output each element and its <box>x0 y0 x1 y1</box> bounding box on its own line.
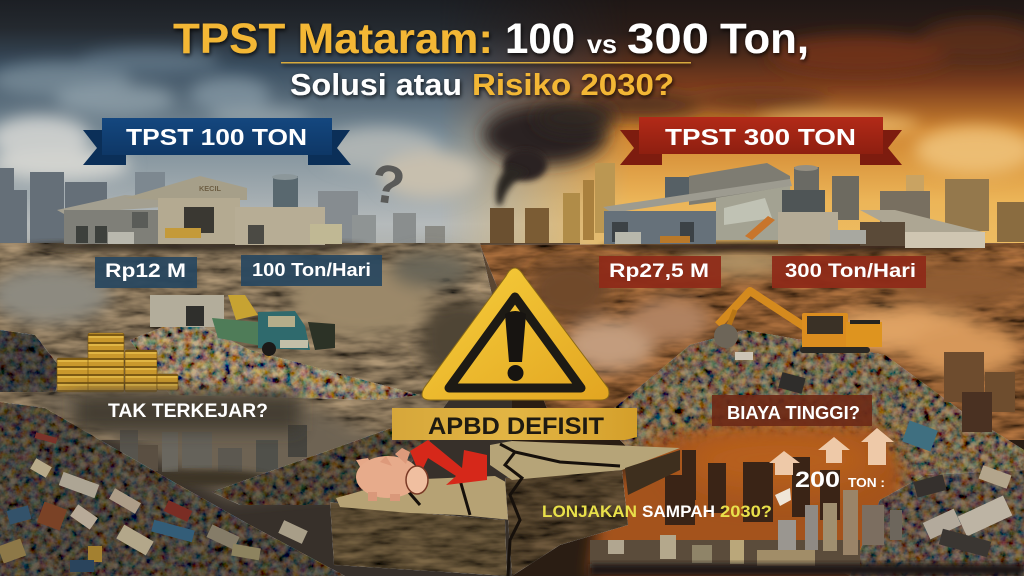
label: BIAYA TINGGI?: BIAYA TINGGI? <box>727 403 860 423</box>
label: BIAYA TINGGI? <box>712 395 872 426</box>
title: Ton, <box>720 15 809 63</box>
trash pieces <box>0 432 308 572</box>
title: 100 <box>505 15 575 63</box>
label: 200 TON: TON : <box>848 475 885 490</box>
gray modern city <box>590 490 902 568</box>
ground base <box>0 243 1024 576</box>
left block <box>330 476 520 576</box>
banner: TPST 100 TON: TPST 100 TON <box>126 124 307 150</box>
title: TPST Mataram: <box>173 15 493 63</box>
ground: left terrain <box>0 243 500 440</box>
skyline: left city <box>0 168 445 248</box>
cracked ground platform <box>330 441 680 576</box>
soil tones <box>0 248 1024 395</box>
label: LONJAKAN SAMPAH 2030?: SAMPAH <box>642 502 715 521</box>
label: LONJAKAN SAMPAH 2030? <box>542 502 772 521</box>
ground: right terrain <box>480 243 1024 440</box>
small facility with stairs <box>150 295 258 327</box>
dark city silhouette <box>665 450 840 525</box>
banner: TPST 300 TON <box>620 117 902 165</box>
icon: question mark: ? <box>367 153 409 217</box>
tower <box>272 174 298 212</box>
right building behind heap <box>944 352 1015 432</box>
warning sign <box>422 268 609 400</box>
title: Solusi atau <box>290 67 462 102</box>
title: vs <box>587 29 617 59</box>
factory: small TPST 100 <box>25 174 365 251</box>
skyline: right city <box>490 163 1024 250</box>
label: LONJAKAN SAMPAH 2030?: 2030? <box>720 502 772 521</box>
label: 200 TON: 200 <box>795 467 840 492</box>
label: 200 TON <box>795 467 885 492</box>
trash heap: large right <box>600 330 1024 576</box>
background: split sky <box>0 0 1024 244</box>
label: TAK TERKEJAR? <box>75 395 300 431</box>
icon: rising arrows <box>769 428 894 475</box>
banner: TPST 300 TON: TPST 300 TON <box>665 124 856 150</box>
crack lines <box>400 444 620 576</box>
stat: 300 Ton/Hari <box>772 256 926 288</box>
icon: small white debris <box>775 488 791 506</box>
stat: Rp27,5 M: Rp27,5 M <box>609 261 709 282</box>
bottom dark ground <box>590 564 1024 576</box>
band: APBD DEFISIT <box>392 408 637 440</box>
stat: Rp12 M <box>95 257 197 288</box>
coin stacks <box>57 333 178 392</box>
truck <box>212 311 335 356</box>
title: Risiko 2030? <box>472 67 674 102</box>
exclamation mark <box>505 311 526 381</box>
stat: Rp27,5 M <box>599 256 721 288</box>
icon: red decline arrow <box>410 440 487 485</box>
city glow under heap <box>590 425 905 576</box>
label: LONJAKAN SAMPAH 2030?: LONJAKAN <box>542 502 637 521</box>
stat: 100 Ton/Hari: 100 Ton/Hari <box>252 260 371 280</box>
trash pile: far left dark <box>0 330 62 392</box>
icon: piggy bank <box>356 448 428 501</box>
excavator <box>714 291 882 353</box>
trash pile: mid left <box>130 318 420 400</box>
stat: Rp12 M: Rp12 M <box>105 261 186 282</box>
right block <box>490 441 680 576</box>
stat: 100 Ton/Hari <box>241 255 382 286</box>
trash pieces right <box>735 352 1012 557</box>
label: TAK TERKEJAR?: TAK TERKEJAR? <box>108 401 268 422</box>
trash pile: center <box>212 425 430 505</box>
stat: 300 Ton/Hari: 300 Ton/Hari <box>785 261 916 282</box>
band: APBD DEFISIT: APBD DEFISIT <box>428 413 604 440</box>
smoke plume <box>483 102 615 205</box>
clouds: orange right sky <box>580 20 1024 174</box>
valley: far city in haze <box>20 392 380 500</box>
factory: large TPST 300 <box>600 163 987 252</box>
clouds: blue left sky <box>0 49 480 199</box>
towers <box>794 165 859 220</box>
trash pile: foreground left <box>0 402 345 576</box>
sign: KECIL: KECIL <box>199 186 222 193</box>
banner: TPST 100 TON <box>83 118 351 165</box>
trash heap: bottom right <box>850 470 1024 576</box>
title <box>173 15 809 102</box>
title: 300 <box>627 15 709 63</box>
